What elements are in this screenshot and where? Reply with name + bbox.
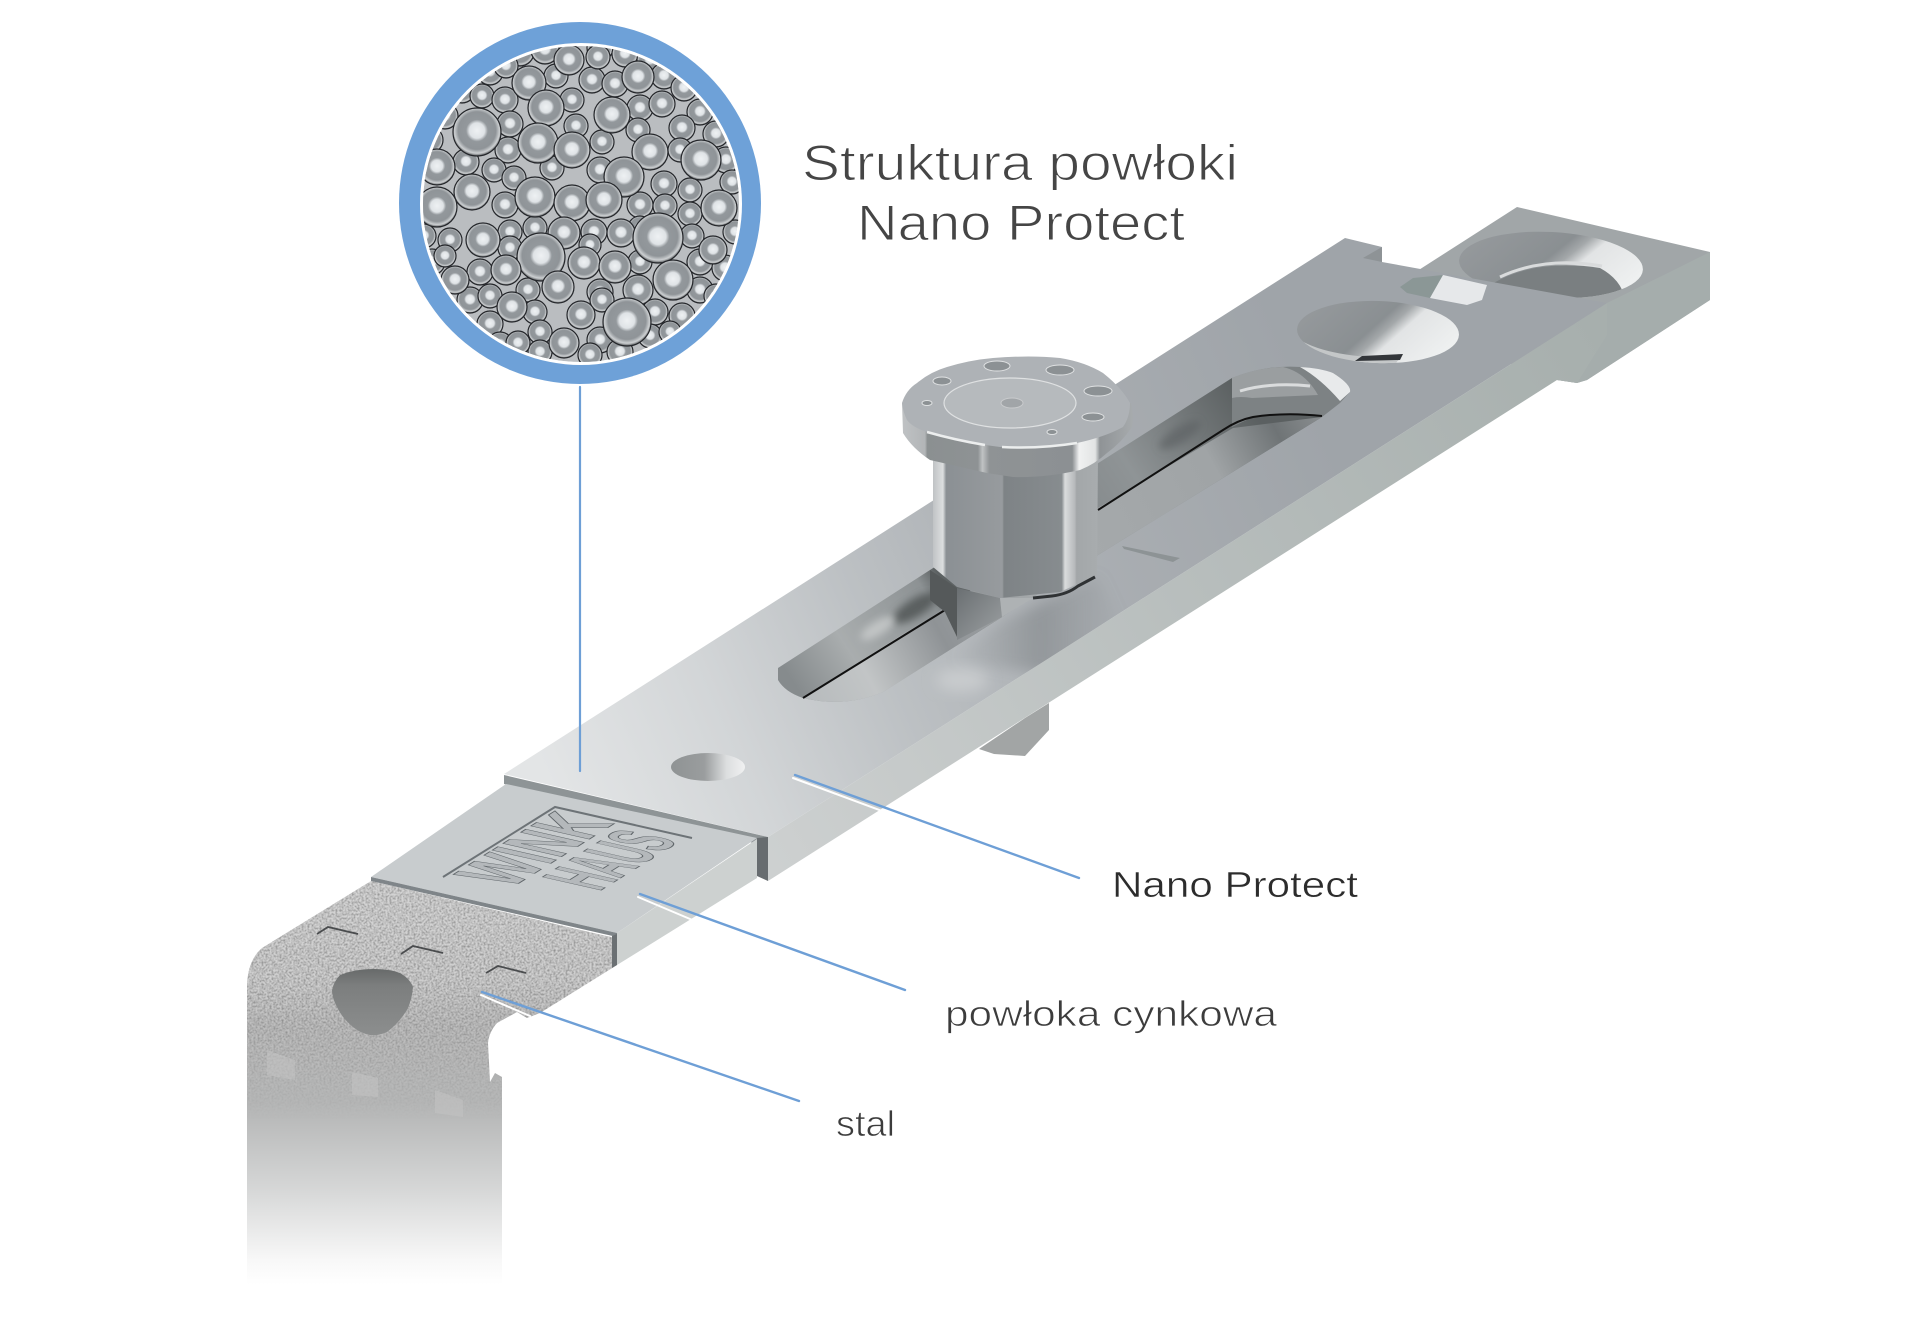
heading line 1: Struktura powłoki	[802, 135, 1238, 191]
zinc coating layer	[371, 784, 757, 968]
embossed logo: WINK	[434, 806, 633, 892]
leader: steel	[482, 992, 799, 1101]
long slot	[778, 367, 1350, 702]
label: zinc coating: powłoka cynkowa	[945, 993, 1278, 1034]
nano protect front edge	[504, 775, 768, 846]
leader lines	[481, 387, 1079, 1101]
hex stub in slot	[957, 588, 1002, 640]
blue ring	[399, 22, 761, 384]
heading	[802, 135, 1238, 251]
light reflection on plate	[936, 668, 988, 692]
leader: zoom circle to plate	[579, 387, 581, 771]
rivet dimple	[332, 969, 413, 1035]
callout circle: coating structure	[399, 22, 761, 384]
leader: zinc coating	[640, 894, 905, 990]
embossed logo: HAUS	[522, 823, 698, 895]
microscopic metal spheres	[423, 46, 739, 362]
dark seat ring	[1033, 577, 1095, 598]
product illustration: layered metal strip with bolt	[247, 207, 1710, 1285]
crack line in slot	[803, 414, 1322, 698]
heading line 2: Nano Protect	[857, 195, 1185, 251]
end countersunk hole	[1459, 232, 1643, 298]
white halos	[481, 778, 920, 1016]
main plate top surface	[504, 238, 1607, 837]
head dimples	[922, 361, 1112, 434]
slot floor	[803, 417, 1322, 702]
main plate side face	[768, 303, 1607, 881]
surface reflection under bolt	[940, 586, 1099, 692]
lower stud under the plate	[979, 703, 1049, 756]
corner marks	[317, 927, 526, 973]
bolt shaft	[933, 455, 1098, 598]
square opening	[1400, 275, 1487, 305]
embossed logo	[434, 806, 701, 907]
inner disc	[944, 378, 1076, 428]
steel base layer	[247, 881, 617, 1285]
bolt head top	[902, 356, 1130, 448]
bolt	[902, 356, 1133, 640]
bolt head side	[902, 403, 1133, 477]
dome at slot end	[1232, 367, 1350, 427]
small round hole	[671, 753, 745, 781]
far end piece	[1400, 207, 1710, 383]
grain texture	[247, 881, 617, 1130]
label: Nano Protect: Nano Protect	[1112, 864, 1358, 905]
tick mark on plate	[1122, 546, 1180, 562]
dark and light patches in slot	[888, 587, 942, 629]
label: steel: stal	[836, 1103, 895, 1144]
steel body	[247, 881, 617, 1285]
leader: Nano Protect	[795, 775, 1079, 878]
square embossed marks	[267, 1050, 463, 1117]
middle countersunk hole	[1297, 301, 1459, 364]
